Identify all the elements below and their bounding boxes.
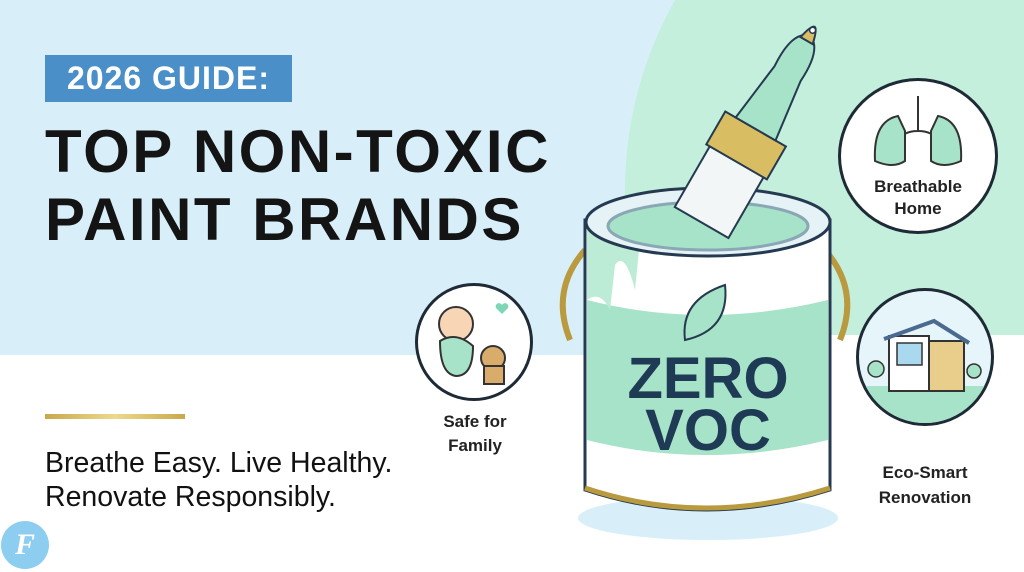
title: PAINT BRANDS: [45, 186, 524, 253]
tagline: [45, 447, 392, 513]
label: safe for family: Safe for: [443, 412, 507, 431]
icon: breathable home: Breathable: [874, 177, 962, 196]
badge: 2026 guide: [45, 55, 292, 102]
paint can with brush: [560, 26, 850, 540]
label: ZERO: [627, 346, 789, 411]
icon: breathable home: Home: [894, 199, 942, 218]
logo: [1, 521, 49, 569]
label: safe for family: Family: [448, 436, 502, 455]
paint can with brush: VOC: [645, 398, 771, 463]
tagline: Breathe Easy. Live Healthy.: [45, 447, 392, 479]
tagline: Renovate Responsibly.: [45, 481, 336, 513]
icon: breathable home: [838, 78, 998, 234]
logo: F: [15, 528, 35, 561]
badge: 2026 guide: 2026 GUIDE:: [67, 60, 270, 96]
label: eco-smart renovation: [879, 463, 971, 507]
label: eco-smart renovation: Renovation: [879, 488, 971, 507]
icon: eco-smart house: [856, 288, 994, 426]
leaf: [684, 285, 726, 340]
icon: safe for family: [415, 283, 533, 401]
gold divider: [45, 414, 185, 419]
background: [0, 0, 1024, 355]
body: [585, 220, 830, 510]
label: eco-smart renovation: Eco-Smart: [882, 463, 968, 482]
brush: [671, 9, 845, 240]
title: [45, 118, 551, 253]
label: safe for family: [443, 412, 507, 455]
handle: [563, 250, 847, 340]
title: TOP NON-TOXIC: [45, 118, 551, 185]
